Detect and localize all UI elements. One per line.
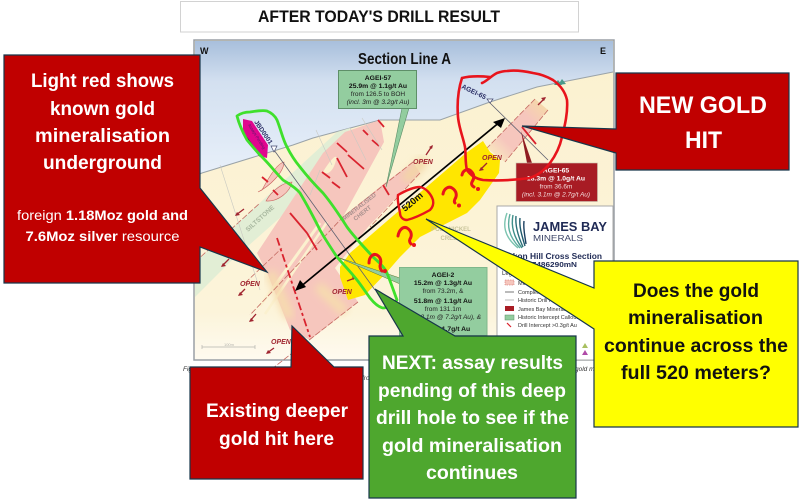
caption fragments under the map: Figure 3 [183,366,207,373]
callout AGEI-65: from 36.6m [540,184,572,190]
logo and legend panel: Mineralised Zone [518,281,560,287]
logo and legend panel: MINERALS [533,233,583,243]
logo and legend panel: Drill Intercept >0.3g/t Au [518,323,577,329]
callout AGEI-2: (incl. 3.1m @ 7.2g/t Au), & [405,314,481,321]
gold zone [340,141,500,300]
logo and legend panel: James Bay Minerals [518,307,568,313]
drill traces [220,103,548,290]
icon: James Bay leaf [505,213,526,248]
callout: light red explanation: Light red shows [31,70,174,92]
callout: next assay results: continues [426,462,518,484]
logo and legend panel: Historic Intercept Callout [518,315,578,321]
caption fragments under the map: from [362,375,376,382]
callout AGEI-65: 18.3m @ 1.0g/t Au [527,176,585,182]
red outline around 520m label: 520m [400,190,426,214]
callout AGEI-65 [516,131,598,202]
compass E: E [600,46,606,56]
callout AGEI-2: from 73.2m, & [423,288,464,295]
callout: question on continuity: full 520 meters? [621,362,771,384]
callout: next assay results: gold mineralisation [382,435,562,457]
callout AGEI-2 [337,257,487,336]
red question marks [369,170,480,273]
callout: light red explanation: known gold [50,98,155,120]
surface triangles [554,79,566,85]
sky [195,41,613,176]
callout: light red explanation: underground [43,152,162,174]
callout AGEI-2: 9.1m @ 1.7g/t Au [416,326,470,333]
callout AGEI-57: (incl. 3m @ 3.2g/t Au) [347,99,409,106]
logo and legend panel: Historic Drill Hole [518,298,560,304]
callout: question on continuity: continue across the [604,335,788,357]
callout AGEI-2: 51.8m @ 1.1g/t Au [414,298,472,305]
OPEN labels and arrows: OPEN [482,155,503,162]
callout AGEI-57: AGEI-57 [365,75,391,82]
mineralised chert label: MINERALISED [342,192,378,223]
logo and legend panel: Completed Drill Hole [518,290,568,296]
caption fragments under the map: gold m [575,366,595,373]
siltstone band [195,128,350,297]
title box [180,2,578,32]
OPEN labels and arrows: OPEN [271,339,292,346]
assay pending polygon: Assays Pending [247,123,267,150]
callout AGEI-65: AGEI-65 [543,168,569,174]
callout: existing deeper hit: Existing deeper [206,400,348,422]
red outline around 520m label [398,187,433,220]
drill collar JBD0001: JBD0001 [252,119,274,146]
green hand-drawn outline around deep drill hole [237,111,397,308]
caption fragments under the map [183,366,595,382]
callout: question on continuity [426,219,798,427]
assay pending polygon [243,119,268,158]
callout: new gold hit: HIT [685,127,722,154]
scale bar: 100m [224,342,235,347]
faint nickel label: CREEK [440,236,462,242]
callout: existing deeper hit [190,326,363,479]
OPEN labels and arrows: OPEN [413,159,434,166]
mineralised band near AGEI-65 [487,99,548,162]
callout: question on continuity: mineralisation [628,307,763,329]
compass W: W [200,46,209,56]
callout: next assay results: NEXT: assay results [382,352,563,374]
logo and legend panel: Legend [502,271,522,277]
callout: new gold hit [522,73,789,170]
faint nickel label: POLY NICKEL [431,227,471,233]
section title: Section Line A [358,51,451,68]
title box: AFTER TODAY'S DRILL RESULT [258,8,500,26]
callout AGEI-57: 25.9m @ 1.1g/t Au [349,83,407,90]
mineralised bands [195,120,425,375]
cross-section map [194,40,614,375]
red hand-drawn circle around new hit [458,71,567,180]
callout: existing deeper hit: gold hit here [219,428,334,450]
callout: light red explanation: 7.6Moz silver resource [26,229,180,244]
scale bar [202,342,255,349]
callout AGEI-57 [338,70,416,187]
black arrow: 520m extent [295,118,505,291]
callout: next assay results [369,289,576,498]
logo and legend panel: JAMES BAY [533,220,608,234]
logo and legend panel: Pukon Hill Cross Section [502,252,602,261]
callout AGEI-2: AGEI-2 [432,272,455,279]
drill collar JBD0001 [252,119,277,152]
callout: new gold hit: NEW GOLD [639,92,767,119]
callout: next assay results: drill hole to see if the [376,407,569,429]
callout AGEI-57: from 126.5 to BOH [351,91,405,98]
ground line [195,72,613,176]
drill intercepts [262,120,536,337]
callout AGEI-2: 15.2m @ 1.3g/t Au [414,280,472,287]
OPEN labels and arrows: OPEN [332,289,353,296]
logo and legend panel: Line A: 7486290mN [502,260,577,269]
callout: question on continuity: Does the gold [633,280,759,302]
drill collar AGEI-65: AGEI-65 [460,84,487,101]
OPEN labels and arrows [221,97,546,354]
siltstone label: SILTSTONE [245,204,276,233]
callout: light red explanation: mineralisation [35,125,170,147]
callout AGEI-2: from 131.1m [425,306,461,313]
callout: light red explanation [4,55,267,283]
callout: light red explanation: foreign 1.18Moz gold and [17,208,188,223]
callout: next assay results: pending of this deep [378,380,566,402]
mineralised chert label: CHERT [353,205,373,223]
callout AGEI-65: (incl. 3.1m @ 2.7g/t Au) [522,192,590,198]
logo and legend panel [497,206,613,360]
OPEN labels and arrows: OPEN [240,281,261,288]
